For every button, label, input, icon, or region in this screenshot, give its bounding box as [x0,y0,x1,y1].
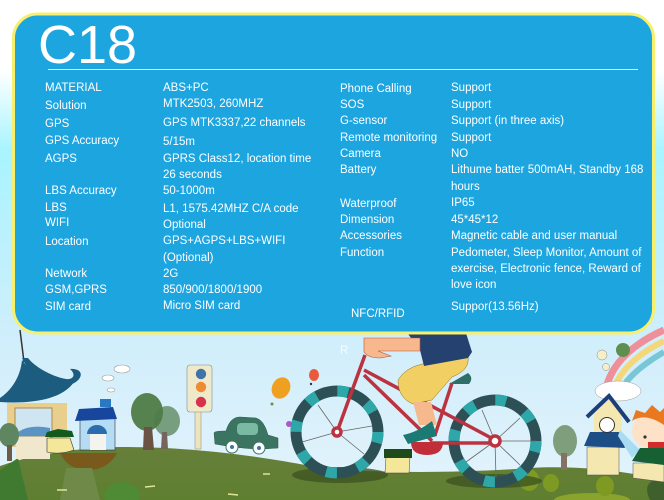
left spec values: (Optional) [163,252,214,264]
left spec values: 5/15m [163,136,195,148]
rear wheel [292,391,388,483]
right spec labels: Camera [340,148,382,160]
left spec labels: Network [45,268,87,280]
chain ring [411,442,443,455]
arm on handlebar [364,338,420,358]
right spec labels: Waterproof [340,198,397,210]
right spec values: Pedometer, Sleep Monitor, Amount of [451,247,642,259]
green car [214,417,278,454]
left spec labels: Solution [45,100,87,112]
left spec values: ABS+PC [163,82,209,94]
right spec values: Support [451,82,492,94]
rider legs [398,357,468,404]
left spec values: GPS+AGPS+LBS+WIFI [163,235,285,247]
right spec labels [340,83,437,320]
left spec labels [45,82,119,313]
right spec values: Support [451,132,492,144]
trees [131,393,180,450]
left spec labels: WIFI [45,217,69,229]
left spec values: Micro SIM card [163,300,240,312]
left spec labels: GPS Accuracy [45,135,119,147]
left spec values: GPS MTK3337,22 channels [163,117,306,129]
right spec labels: Remote monitoring [340,132,437,144]
pagoda building [0,330,81,461]
hot air balloons [268,369,319,427]
right spec labels: G-sensor [340,115,387,127]
title: C18 [38,15,137,75]
left spec labels: AGPS [45,153,77,165]
right spec values: Support (in three axis) [451,115,564,127]
small house under bike [384,449,412,473]
title divider [48,69,638,70]
saddle [449,373,471,384]
small green roof house [45,429,74,453]
left spec labels: LBS Accuracy [45,185,117,197]
right spec values: Lithume batter 500mAH, Standby 168 [451,164,643,176]
left spec values: MTK2503, 260MHZ [163,98,263,110]
rainbow [595,330,664,401]
left spec values [163,82,311,312]
shorts [405,330,472,366]
bicycle with rider [292,330,542,488]
green roof house right [632,448,664,482]
left spec labels: GPS [45,118,70,130]
right spec values: Support [451,99,492,111]
stray letter R: R [340,345,348,357]
left spec labels: MATERIAL [45,82,102,94]
right spec values: IP65 [451,197,475,209]
right spec values: NO [451,148,468,160]
left spec values: 50-1000m [163,185,215,197]
right spec values: hours [451,181,480,193]
right spec values: exercise, Electronic fence, Reward of [451,263,642,275]
main blue panel [14,14,654,333]
left spec values: 26 seconds [163,169,222,181]
left spec values: GPRS Class12, location time [163,153,311,165]
left spec labels: GSM,GPRS [45,284,107,296]
right spec labels: Phone Calling [340,83,412,95]
left spec labels: SIM card [45,301,91,313]
traffic light [187,365,212,449]
clouds [102,365,130,392]
shoe [403,421,437,444]
cream house right [584,396,629,475]
far tree [553,425,577,470]
right spec values: Suppor(13.56Hz) [451,301,539,313]
right spec labels: Accessories [340,230,402,242]
front wheel [446,400,542,488]
ground details [0,453,664,500]
ground hill [0,447,664,500]
right spec labels: Dimension [340,214,394,226]
left spec values: 2G [163,268,178,280]
frame [333,355,500,446]
left spec values: Optional [163,219,206,231]
left spec labels: LBS [45,202,67,214]
boy character [618,405,664,458]
right spec values [451,82,643,313]
right spec values: Magnetic cable and user manual [451,230,617,242]
right spec values: 45*45*12 [451,214,498,226]
blue house [75,399,117,450]
left spec values: 850/900/1800/1900 [163,284,262,296]
right spec values: love icon [451,279,496,291]
left spec values: L1, 1575.42MHZ C/A code [163,203,299,215]
left spec labels: Location [45,236,88,248]
right spec labels: Function [340,247,384,259]
right spec labels: NFC/RFID [351,308,405,320]
right spec labels: Battery [340,164,377,176]
right spec labels: SOS [340,99,365,111]
